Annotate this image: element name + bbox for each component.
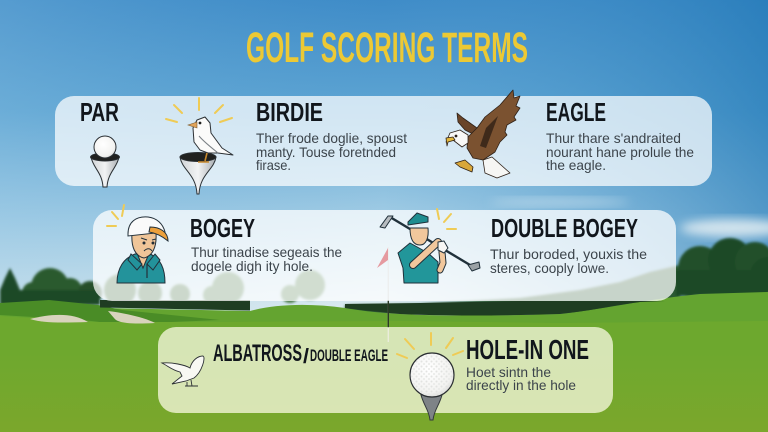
text: double bogey description: steres, cooply lowe.	[490, 260, 609, 276]
background: sky	[0, 0, 768, 320]
icon: hole in one ball on tee	[397, 333, 463, 420]
text: hole in one description: Hoet sintn the	[466, 364, 551, 380]
text: birdie description: manty. Touse foretnded	[256, 144, 396, 160]
title: GOLF SCORING TERMS	[246, 24, 528, 72]
icon: golfer with club	[380, 209, 480, 283]
text: double bogey description: Thur boroded, youxis the	[490, 246, 647, 262]
icon: birdie on tee with rays	[166, 98, 233, 194]
text: eagle description: the eagle.	[546, 157, 606, 173]
icon: par ball on tee	[90, 136, 120, 187]
heading: birdie: BIRDIE	[256, 97, 323, 127]
heading: albatross: /	[303, 346, 309, 368]
heading: par: PAR	[80, 97, 119, 127]
background: tree line	[0, 238, 768, 314]
text: birdie description: Ther frode doglie, spoust	[256, 130, 407, 146]
text: eagle description: nourant hane prolule the	[546, 144, 694, 160]
heading: bogey: BOGEY	[190, 213, 255, 243]
text: bogey description: dogele digh ity hole.	[191, 258, 313, 274]
text: birdie description: firase.	[256, 157, 291, 173]
background: golf course	[0, 292, 768, 432]
heading: albatross: ALBATROSS	[213, 340, 302, 367]
heading: hole in one: HOLE-IN ONE	[466, 334, 589, 365]
icon: albatross	[162, 356, 204, 386]
heading: eagle: EAGLE	[546, 97, 606, 127]
flag pole	[388, 247, 389, 342]
flag	[377, 248, 388, 268]
text: eagle description: Thur thare s'andraited	[546, 130, 681, 146]
panel: par birdie eagle	[55, 96, 712, 186]
bunkers	[30, 315, 88, 323]
background: distant hedge strips	[100, 300, 665, 316]
icon: bogey man	[107, 205, 168, 283]
heading: albatross: DOUBLE EAGLE	[310, 347, 388, 365]
heading: double bogey: DOUBLE BOGEY	[491, 213, 638, 243]
icon: eagle	[446, 90, 520, 178]
text: bogey description: Thur tinadise segeais the	[191, 244, 342, 260]
text: hole in one description: directly in the hole	[466, 377, 576, 393]
panel: albatross hole in one	[158, 327, 613, 413]
panel: bogey double bogey	[93, 210, 676, 301]
